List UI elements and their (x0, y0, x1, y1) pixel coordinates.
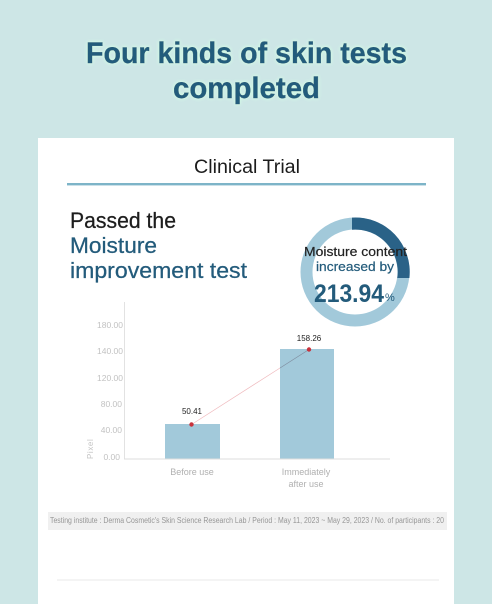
donut chart: moisture content (304, 217, 410, 320)
category label: before use: Before use (170, 467, 214, 477)
bar: immediately after use (280, 349, 334, 458)
test result heading: Moisture (70, 233, 157, 258)
y axis labels: 120.00 (97, 373, 123, 383)
test result heading (70, 208, 247, 283)
donut label: % (385, 292, 395, 304)
y axis labels: 140.00 (97, 346, 123, 356)
category label: immediately after use (282, 467, 331, 489)
test details note (48, 512, 447, 530)
test result heading: improvement test (70, 258, 247, 283)
title: completed (173, 72, 320, 105)
y axis labels: 180.00 (97, 320, 123, 330)
data point: before use (189, 422, 194, 427)
donut label: 213.94 (314, 280, 384, 308)
y axis labels: 80.00 (101, 399, 122, 409)
test result heading: Passed the (70, 208, 176, 233)
value label: after use: 158.26 (297, 334, 322, 343)
panel: clinical trial (38, 138, 454, 604)
title (86, 37, 407, 105)
category label: immediately after use: Immediately (282, 467, 331, 477)
y axis labels: 40.00 (101, 425, 122, 435)
y axis labels (97, 320, 123, 462)
bar: before use (165, 424, 220, 458)
data point: after use (307, 347, 311, 352)
donut label (304, 244, 407, 308)
title: Four kinds of skin tests (86, 37, 407, 70)
y axis title: Pixel (86, 439, 95, 459)
trend line (192, 350, 309, 424)
category label: immediately after use: after use (288, 479, 324, 489)
donut label: Moisture content (304, 244, 407, 259)
y axis labels: 0.00 (103, 452, 120, 462)
donut label: increased by (316, 259, 395, 274)
bar chart: moisture before and after (86, 302, 390, 489)
panel heading: Clinical Trial (194, 157, 300, 178)
value label: before use: 50.41 (182, 407, 203, 416)
